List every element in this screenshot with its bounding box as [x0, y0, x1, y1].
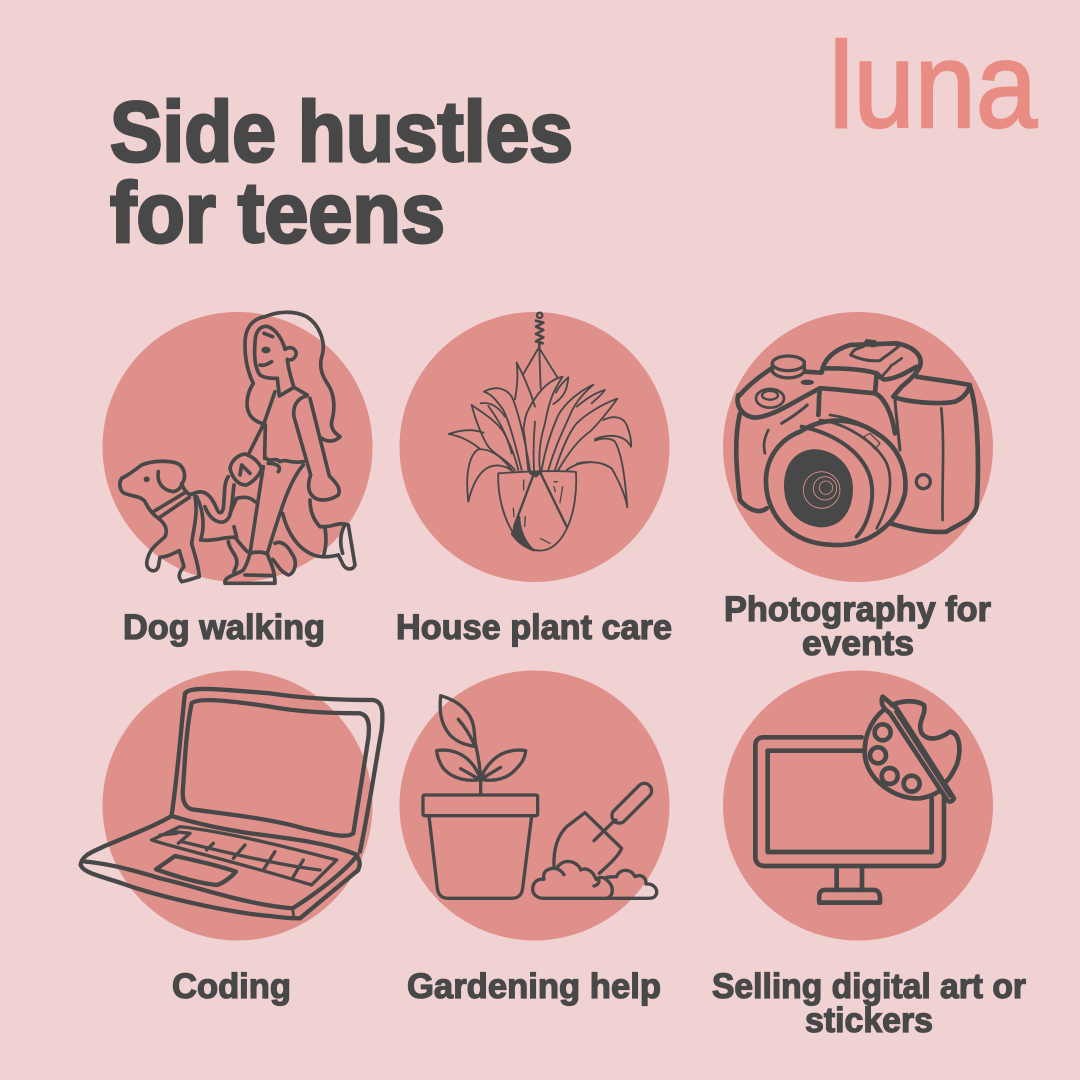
panel: house plant care	[396, 312, 672, 647]
label	[712, 967, 1026, 1040]
icon: girl walking dog	[120, 312, 355, 583]
title: for teens	[110, 166, 445, 261]
label	[724, 590, 991, 663]
panel: selling digital art or stickers	[712, 670, 1026, 1040]
logo: luna: luna	[829, 17, 1037, 153]
label: events	[802, 624, 914, 663]
icon: pot and trowel	[423, 696, 657, 898]
panel: coding	[81, 670, 382, 1006]
icon: monitor with palette	[755, 697, 959, 903]
panel: gardening help	[400, 670, 670, 1006]
label: Selling digital art or	[712, 967, 1026, 1006]
label: Gardening help	[407, 967, 661, 1006]
label: Dog walking	[123, 608, 325, 647]
label: Coding	[172, 967, 291, 1006]
icon: hanging plant	[449, 313, 631, 551]
title: Side hustles	[110, 85, 573, 180]
label: stickers	[805, 1001, 933, 1040]
panel: dog walking	[102, 312, 372, 647]
icon: camera	[736, 341, 978, 545]
panel: photography for events	[723, 312, 993, 663]
label: Photography for	[724, 590, 991, 629]
title	[110, 85, 573, 261]
label: House plant care	[396, 608, 672, 647]
icon: laptop	[81, 689, 382, 918]
